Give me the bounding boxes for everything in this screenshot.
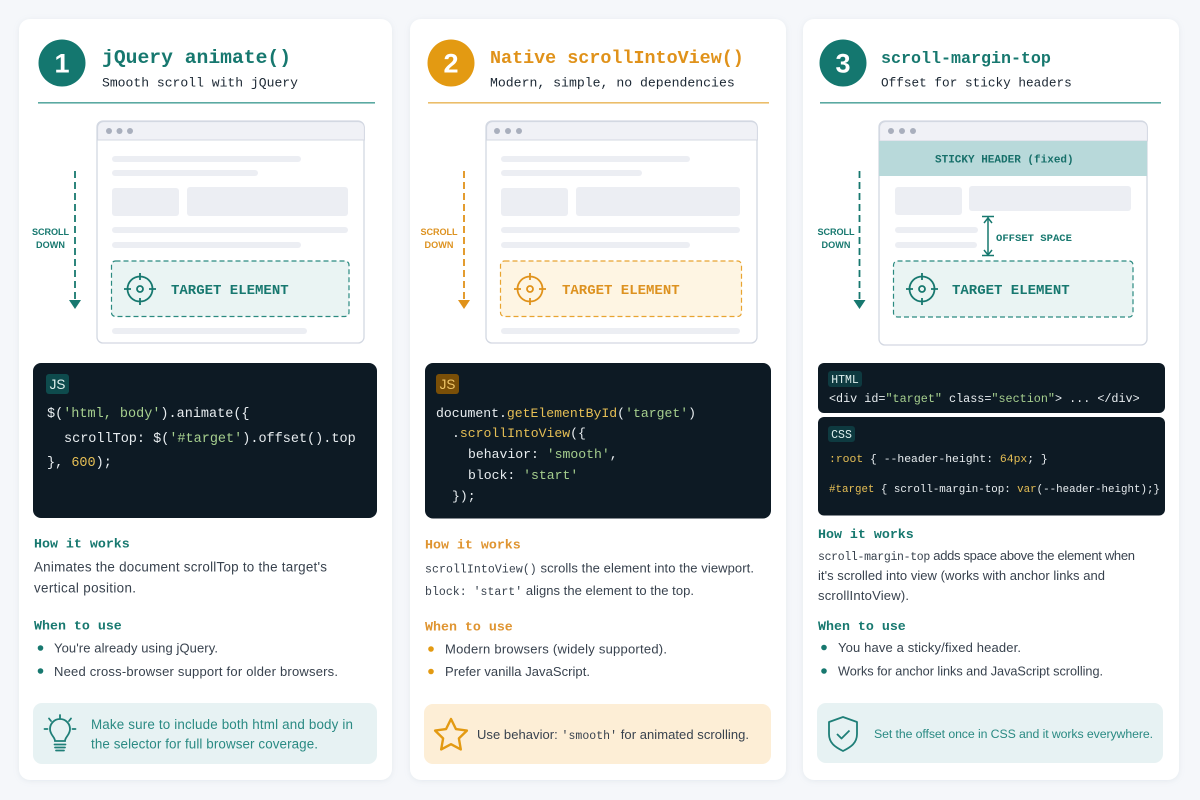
list: when to use bbox=[428, 642, 667, 679]
code block: HTML: HTML bbox=[831, 374, 859, 387]
text: how it works: it's scrolled into view (works with anchor links and bbox=[818, 568, 1105, 583]
code block: jQuery: JS bbox=[50, 377, 65, 392]
scroll down arrow bbox=[32, 171, 81, 309]
heading: when to use: When to use bbox=[818, 619, 906, 634]
browser illustration bbox=[879, 121, 1147, 345]
heading: Native scrollIntoView(): Native scrollIntoView() bbox=[490, 48, 744, 69]
scroll down arrow: DOWN bbox=[36, 240, 65, 250]
code block: HTML: <div id="target" class="section"> ... </div> bbox=[829, 392, 1140, 406]
code block: scrollIntoView bbox=[425, 363, 771, 518]
subtitle: Smooth scroll with jQuery bbox=[102, 76, 298, 90]
heading: when to use: When to use bbox=[425, 620, 513, 634]
badge: number 2 bbox=[428, 40, 474, 86]
code block: scrollIntoView: }); bbox=[452, 489, 476, 504]
scroll down arrow: SCROLL bbox=[420, 227, 458, 237]
sticky header band bbox=[879, 141, 1147, 176]
code block: CSS: #target { scroll-margin-top: var(--header-height);} bbox=[829, 484, 1160, 496]
text: tip: the selector for full browser coverage. bbox=[91, 736, 318, 752]
subtitle: Offset for sticky headers bbox=[881, 76, 1072, 90]
badge: number 3 bbox=[820, 40, 866, 86]
text: how it works: vertical position. bbox=[34, 580, 136, 596]
badge: number 1: 1 bbox=[54, 48, 70, 78]
browser illustration bbox=[486, 121, 757, 343]
list: when to use: Prefer vanilla JavaScript. bbox=[445, 664, 590, 679]
code block: jQuery: scrollTop: $('#target').offset().top bbox=[64, 432, 356, 447]
text: how it works: scrollIntoView). bbox=[818, 588, 909, 603]
heading: how it works: How it works bbox=[818, 527, 914, 542]
target element bbox=[894, 261, 1133, 317]
code block: HTML bbox=[818, 363, 1165, 413]
scroll down arrow bbox=[420, 171, 470, 309]
code block: jQuery bbox=[33, 363, 377, 518]
list: when to use: You're already using jQuery. bbox=[54, 640, 218, 656]
text: tip: Use behavior: 'smooth' for animated scrolling. bbox=[477, 727, 749, 743]
target element bbox=[112, 261, 349, 316]
code block: scrollIntoView: JS bbox=[440, 377, 455, 392]
scroll down arrow: SCROLL bbox=[32, 227, 69, 237]
heading: jQuery animate(): jQuery animate() bbox=[102, 47, 291, 69]
text: how it works: scrollIntoView() scrolls the element into the viewport. bbox=[425, 560, 754, 576]
scroll down arrow: DOWN bbox=[424, 240, 454, 250]
code block: jQuery: $('html, body').animate({ bbox=[47, 407, 250, 422]
callout: tip bbox=[424, 704, 771, 764]
panel: jQuery animate bbox=[19, 19, 392, 780]
badge: number 2: 2 bbox=[443, 48, 459, 78]
list: when to use bbox=[821, 640, 1103, 678]
subtitle: Modern, simple, no dependencies bbox=[490, 76, 735, 90]
heading: when to use: When to use bbox=[34, 618, 122, 634]
target element bbox=[500, 261, 742, 316]
panel: scroll-margin-top bbox=[803, 19, 1179, 780]
list: when to use: Works for anchor links and JavaScript scrolling. bbox=[838, 664, 1103, 678]
icon: light bulb bbox=[44, 715, 76, 750]
code block: scrollIntoView: behavior: 'smooth', bbox=[468, 447, 618, 462]
icon: star bbox=[435, 719, 467, 749]
list: when to use: Need cross-browser support for older browsers. bbox=[54, 664, 338, 679]
target element: TARGET ELEMENT bbox=[562, 283, 680, 299]
scroll down arrow bbox=[818, 171, 866, 309]
heading: scroll-margin-top: scroll-margin-top bbox=[881, 50, 1051, 69]
list: when to use: Modern browsers (widely supported). bbox=[445, 642, 667, 656]
text: how it works: scroll-margin-top adds space above the element when bbox=[818, 548, 1135, 564]
code block: jQuery: }, 600); bbox=[47, 456, 112, 471]
code block: CSS: CSS bbox=[831, 429, 852, 442]
text: how it works: Animates the document scrollTop to the target's bbox=[34, 560, 327, 574]
list: when to use: You have a sticky/fixed header. bbox=[838, 640, 1021, 655]
code block: scrollIntoView: document.getElementById('target') bbox=[436, 406, 696, 421]
scroll down arrow: SCROLL bbox=[818, 227, 855, 237]
text: how it works bbox=[425, 560, 754, 599]
text: how it works: block: 'start' aligns the element to the top. bbox=[425, 583, 694, 599]
browser illustration bbox=[97, 121, 364, 343]
target element: TARGET ELEMENT bbox=[952, 283, 1070, 299]
badge: number 1 bbox=[38, 40, 86, 86]
text: how it works bbox=[818, 548, 1135, 603]
code block: scrollIntoView: .scrollIntoView({ bbox=[452, 426, 586, 441]
callout: tip bbox=[33, 703, 377, 764]
code block: scrollIntoView: block: 'start' bbox=[468, 468, 578, 483]
icon: shield with check bbox=[829, 717, 857, 751]
sticky header band: STICKY HEADER (fixed) bbox=[935, 154, 1074, 166]
offset space marker: OFFSET SPACE bbox=[996, 233, 1072, 245]
badge: number 3: 3 bbox=[835, 48, 851, 78]
list: when to use bbox=[38, 640, 338, 679]
panel: Native scrollIntoView bbox=[410, 19, 786, 780]
code block: CSS: :root { --header-height: 64px; } bbox=[829, 454, 1048, 466]
scroll down arrow: DOWN bbox=[822, 240, 850, 250]
text: tip: Make sure to include both html and body in bbox=[91, 717, 353, 732]
heading: how it works: How it works bbox=[34, 536, 130, 552]
text: tip: Set the offset once in CSS and it works everywhere. bbox=[874, 727, 1153, 741]
offset space marker bbox=[982, 216, 1072, 256]
code block: CSS bbox=[818, 417, 1165, 516]
text: tip bbox=[91, 717, 353, 752]
text: how it works bbox=[34, 560, 327, 596]
callout: tip bbox=[817, 703, 1163, 763]
target element: TARGET ELEMENT bbox=[171, 283, 289, 299]
heading: how it works: How it works bbox=[425, 538, 521, 552]
